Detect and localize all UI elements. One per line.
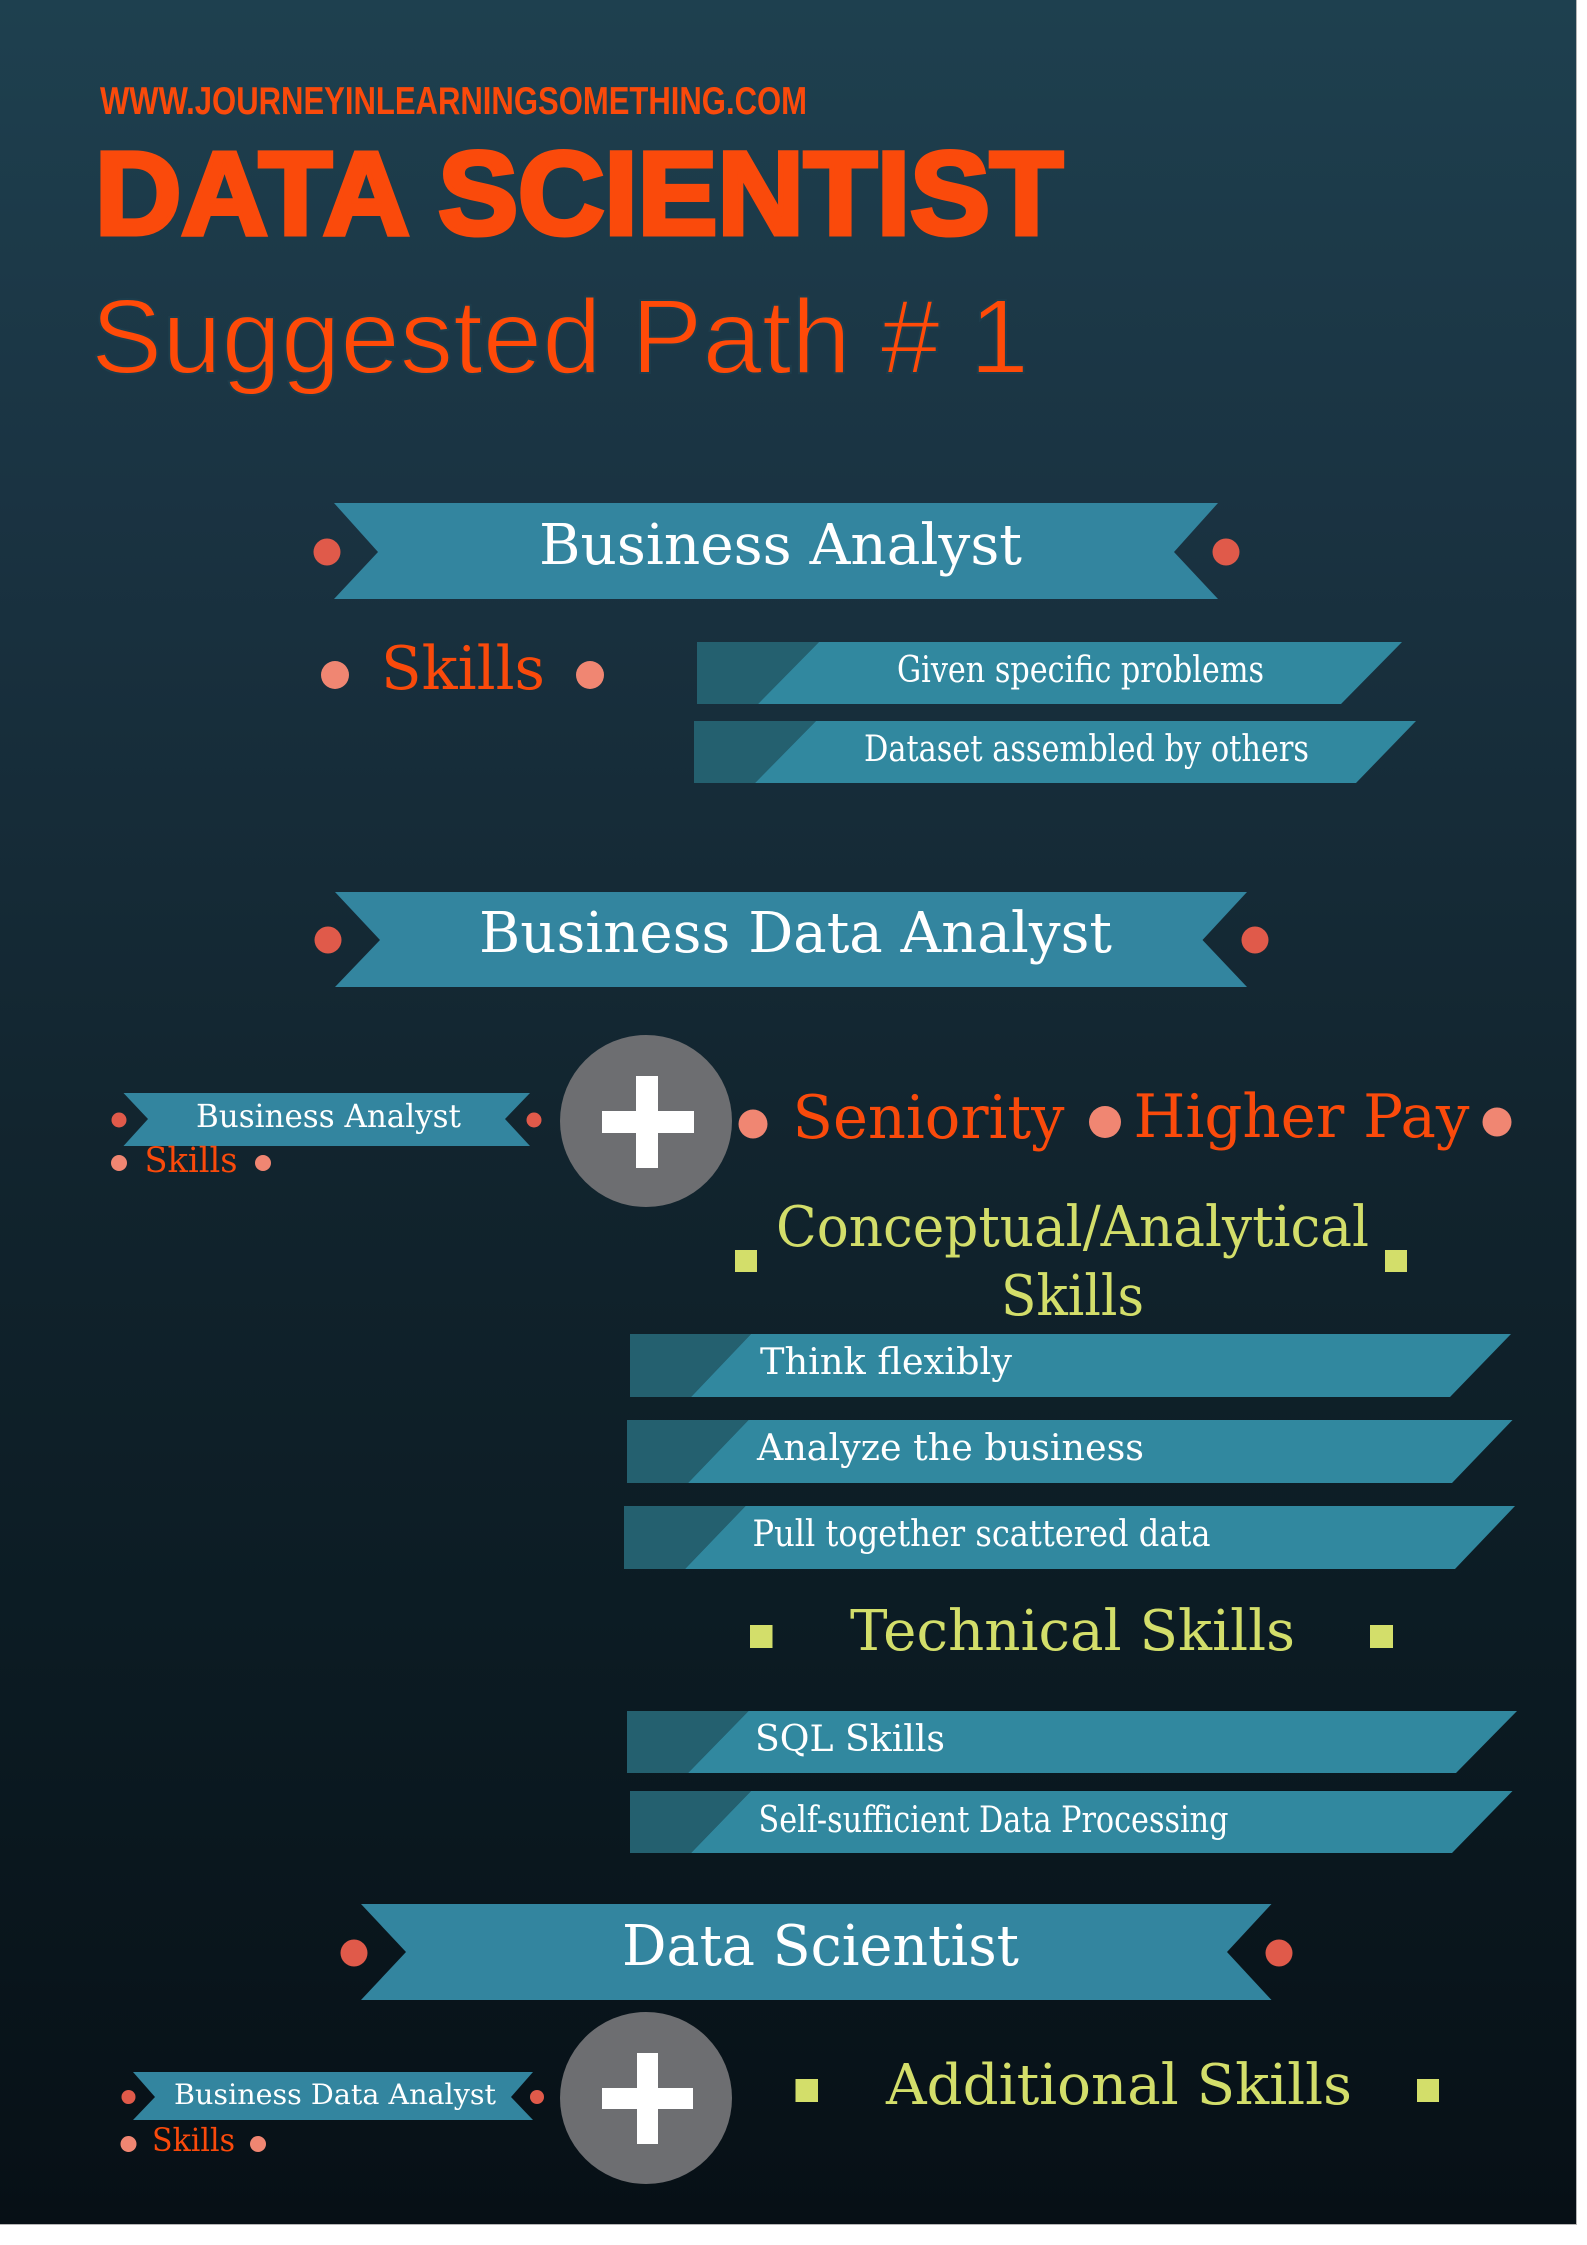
small banner: Business Data Analyst bbox=[122, 2072, 544, 2120]
section banner: Business Data Analyst: Business Data Analyst bbox=[479, 901, 1112, 966]
skill bar: Given specific problems: Given specific problems bbox=[897, 650, 1264, 691]
icon: plus bbox=[560, 2012, 732, 2184]
small skills label: Skills bbox=[144, 1141, 238, 1181]
small skills label bbox=[111, 1141, 271, 1181]
skill bar: Analyze the business: Analyze the business bbox=[756, 1428, 1144, 1469]
section banner: Business Analyst bbox=[314, 503, 1240, 599]
skill bar: Think flexibly bbox=[630, 1334, 1511, 1397]
skill bar: SQL Skills: SQL Skills bbox=[755, 1719, 945, 1760]
small skills label bbox=[120, 2121, 266, 2159]
skill bar: Pull together scattered data: Pull together scattered data bbox=[752, 1514, 1210, 1555]
section banner: Business Analyst: Business Analyst bbox=[539, 513, 1022, 578]
label: Higher Pay: Higher Pay bbox=[1134, 1082, 1470, 1152]
subtitle: Suggested Path # 1 bbox=[91, 278, 1029, 396]
skills label bbox=[321, 634, 604, 704]
skill bar: Think flexibly: Think flexibly bbox=[760, 1342, 1013, 1383]
small banner: Business Analyst bbox=[112, 1093, 542, 1146]
small banner: Business Data Analyst: Business Data Analyst bbox=[174, 2078, 497, 2111]
heading: Conceptual/Analytical Skills: Conceptual/Analytical bbox=[776, 1195, 1369, 1260]
small banner: Business Analyst: Business Analyst bbox=[196, 1097, 461, 1135]
label: Seniority: Seniority bbox=[792, 1083, 1065, 1153]
section banner: Data Scientist bbox=[340, 1904, 1292, 2000]
skill bar: Pull together scattered data bbox=[624, 1506, 1515, 1569]
skill bar: Self-sufficient Data Processing bbox=[630, 1791, 1512, 1853]
icon: plus bbox=[560, 1035, 732, 1207]
heading: Technical Skills: Technical Skills bbox=[850, 1599, 1295, 1664]
skill bar: Self-sufficient Data Processing: Self-sufficient Data Processing bbox=[758, 1800, 1228, 1841]
skill bar: Analyze the business bbox=[627, 1420, 1512, 1483]
small skills label: Skills bbox=[152, 2121, 235, 2159]
section banner: Business Data Analyst bbox=[314, 892, 1268, 987]
heading: Technical Skills bbox=[750, 1599, 1393, 1664]
website url: WWW.JOURNEYINLEARNINGSOMETHING.COM bbox=[100, 80, 807, 123]
skill bar: Dataset assembled by others bbox=[694, 721, 1416, 783]
section banner: Data Scientist: Data Scientist bbox=[622, 1914, 1019, 1979]
heading: Conceptual/Analytical Skills: Skills bbox=[1001, 1264, 1144, 1329]
skills label: Skills bbox=[381, 634, 545, 704]
skill bar: Given specific problems bbox=[697, 642, 1402, 704]
skill bar: Dataset assembled by others: Dataset assembled by others bbox=[864, 729, 1309, 770]
title: DATA SCIENTIST bbox=[95, 128, 1063, 260]
skill bar: SQL Skills bbox=[627, 1711, 1517, 1773]
heading: Conceptual/Analytical Skills bbox=[735, 1195, 1407, 1329]
heading: Additional Skills: Additional Skills bbox=[885, 2053, 1352, 2118]
